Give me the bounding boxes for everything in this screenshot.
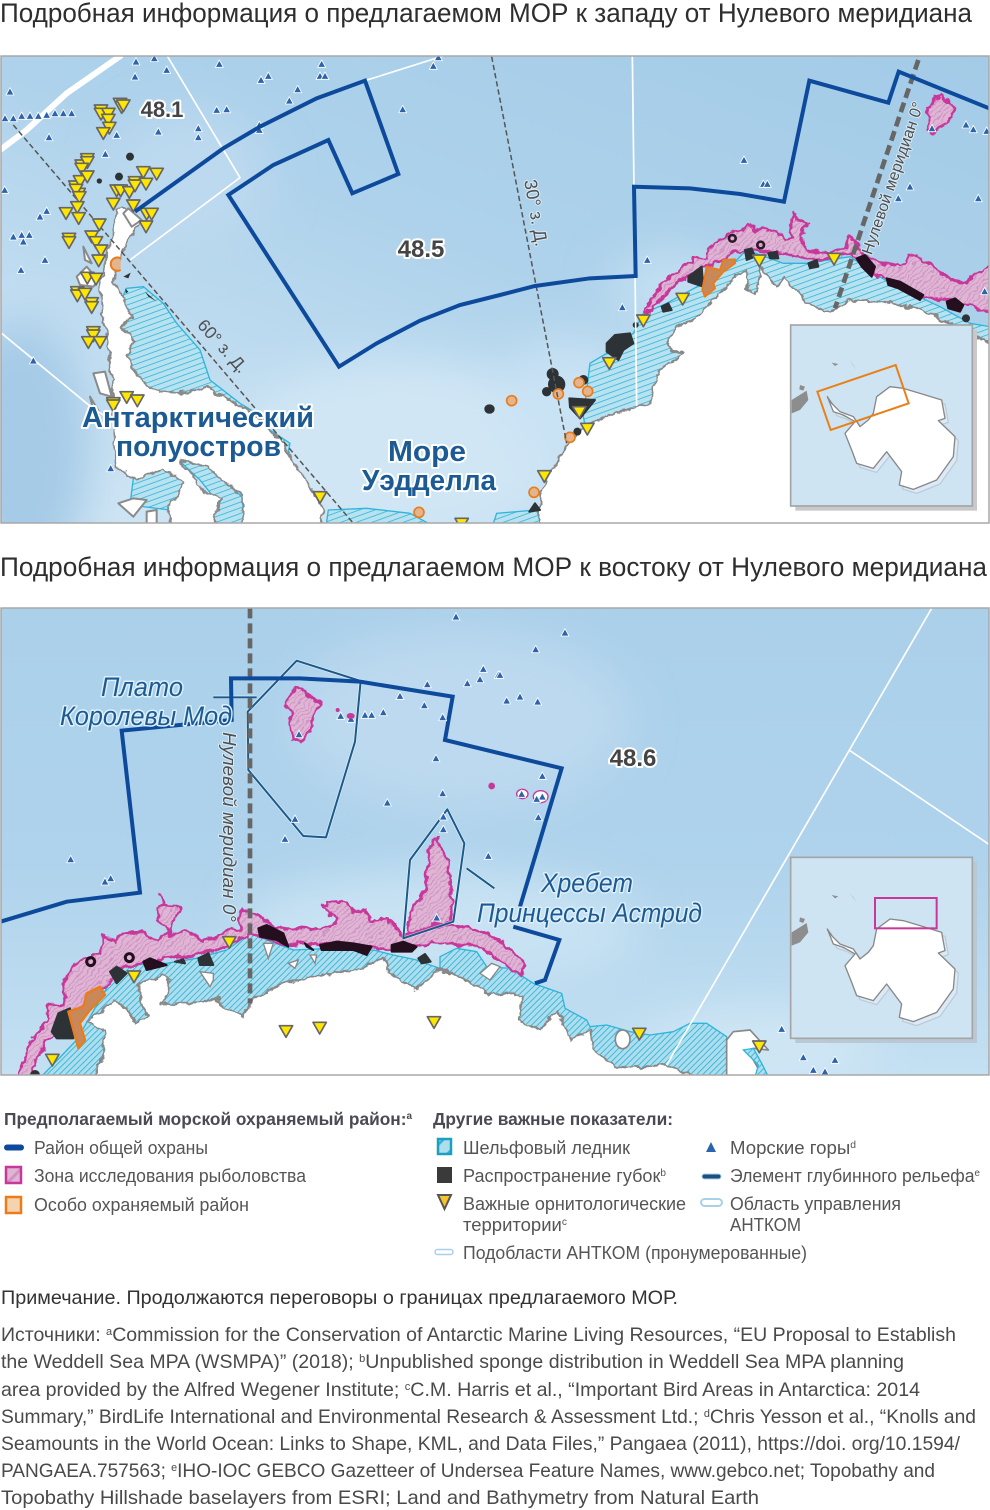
legend: undersea feature: Элемент глубинного рельефа — [730, 1166, 980, 1186]
legend: bird areas — [438, 1194, 686, 1235]
Astrid Ridge fishery research zone — [408, 837, 453, 933]
sources: the Weddell Sea MPA (WSMPA)” (2018); — [1, 1351, 353, 1373]
meridian labels: 30° з. Д. — [520, 178, 552, 248]
legend: CCAMLR area — [701, 1194, 901, 1235]
CCAMLR management area boundary — [0, 55, 122, 153]
seamounts — [1, 53, 442, 472]
Antarctic land — [540, 267, 990, 533]
legend — [4, 1109, 980, 1263]
fishery research zone — [645, 213, 990, 317]
small shelf near east edge — [743, 1048, 772, 1083]
bird areas — [633, 1028, 766, 1053]
label: subarea 48.6: 48.6 — [610, 745, 656, 772]
ocean background — [1, 608, 989, 1075]
sponge distribution — [31, 925, 431, 1079]
ice shelf — [582, 252, 988, 422]
legend: bird areas: c — [562, 1217, 567, 1228]
legend: seamounts: Морские горы — [730, 1138, 846, 1158]
sources: IHO-IOC GEBCO Gazetteer of Undersea Feature Names, www.gebco.net; Topobathy and — [177, 1460, 935, 1482]
small fishery patches — [336, 708, 495, 789]
seamounts — [618, 121, 990, 311]
Maud Rise fishery research zone — [285, 687, 321, 742]
general protection zone boundary — [0, 678, 562, 983]
label: Maud Rise — [60, 672, 232, 731]
label: Antarctic Peninsula: полуостров — [116, 431, 281, 463]
locator inset — [791, 325, 977, 511]
map: west of prime meridian — [2, 56, 988, 522]
meridian label 60 W: 60° з. Д. — [194, 315, 252, 377]
legend: sponges: Распространение губок — [463, 1166, 659, 1186]
sources: area provided by the Alfred Wegener Institute; — [1, 1379, 397, 1401]
sources: Источники: — [1, 1324, 101, 1346]
label: Maud Rise: Плато — [101, 672, 183, 702]
legend: bird areas: Важные орнитологические — [463, 1194, 686, 1214]
meridian labels: Нулевой меридиан 0° — [859, 100, 928, 257]
legend heading: proposed MPA: a — [406, 1111, 412, 1122]
east part — [496, 608, 990, 1083]
ice shelves — [122, 286, 428, 522]
meridian labels — [520, 100, 928, 257]
seamounts — [496, 629, 839, 1075]
sources: Topobathy Hillshade baselayers from ESRI; Land and Bathymetry from Natural Earth — [1, 1487, 759, 1509]
legend: subareas: Подобласти АНТКОМ (пронумерованные) — [463, 1243, 807, 1263]
ocean background — [1, 56, 989, 523]
locator inset — [791, 857, 977, 1043]
map 1 frame — [1, 56, 989, 523]
bird areas — [59, 98, 468, 530]
sources: Summary,” BirdLife International and Environmental Research & Assessment Ltd.; — [1, 1406, 708, 1428]
bird areas — [538, 253, 841, 482]
sources: d — [704, 1408, 710, 1420]
west part: peninsula and Weddell sea — [0, 53, 494, 533]
map 2 frame — [1, 608, 989, 1075]
prime meridian — [835, 60, 918, 308]
special protection area — [68, 987, 105, 1048]
legend: CCAMLR area: АНТКОМ — [730, 1215, 801, 1235]
sources — [1, 1324, 976, 1509]
label: Astrid Ridge: Хребет — [540, 868, 633, 898]
sponge dots — [97, 153, 494, 414]
ice rise and coastal land — [615, 1030, 768, 1083]
label: Weddell Sea — [362, 436, 497, 497]
legend heading: other features: Другие важные показатели: — [433, 1109, 673, 1129]
ice shelf — [35, 933, 728, 1083]
label: Weddell Sea: Уэдделла — [362, 465, 497, 497]
label: Antarctic Peninsula: Антарктический — [82, 402, 314, 434]
label: Weddell Sea: Море — [388, 436, 466, 468]
legend: CCAMLR area: Область управления — [730, 1194, 901, 1214]
sources: Commission for the Conservation of Antarctic Marine Living Resources, “EU Proposal to Establish — [112, 1324, 956, 1346]
map: east of prime meridian — [0, 608, 990, 1090]
CCAMLR subarea line — [632, 55, 637, 406]
east part: Weddell coast — [486, 55, 990, 533]
seamounts — [67, 613, 502, 921]
special protection areas — [507, 259, 735, 497]
title: east map: Подробная информация о предлагаемом МОР к востоку от Нулевого меридиана — [0, 552, 988, 582]
legend: bird areas: территории — [463, 1215, 559, 1235]
sources: e — [171, 1462, 177, 1474]
CCAMLR subarea lines — [667, 608, 990, 1065]
legend: special protection area: Особо охраняемый район — [34, 1195, 249, 1215]
bird areas — [46, 937, 441, 1066]
prime meridian — [243, 608, 257, 1003]
Antarctic land — [88, 958, 713, 1083]
labels: subareas: 48.1 — [141, 97, 183, 122]
general protection zone boundary — [135, 72, 990, 367]
Antarctic Peninsula land — [100, 207, 323, 533]
sources: C.M. Harris et al., “Important Bird Areas in Antarctica: 2014 — [410, 1379, 920, 1401]
meridian label: Нулевой меридиан 0° — [219, 732, 239, 922]
CCAMLR subarea boundaries — [2, 55, 443, 432]
sources: PANGAEA.757563; — [1, 1460, 170, 1482]
map contents — [0, 608, 990, 1083]
sponge distribution — [486, 235, 969, 512]
60 degrees W meridian — [13, 125, 353, 523]
legend heading: proposed MPA: Предполагаемый морской охраняемый район: — [4, 1109, 411, 1129]
legend: ice shelf: Шельфовый ледник — [463, 1138, 630, 1158]
label: Maud Rise: Королевы Мод — [60, 701, 232, 731]
labels: subareas — [141, 97, 444, 263]
legend: undersea feature: e — [975, 1168, 980, 1179]
legend: sponges: b — [660, 1168, 666, 1179]
30 W meridian — [492, 57, 567, 443]
legend: seamounts: d — [850, 1140, 856, 1151]
sources: Seamounts in the World Ocean: Links to Shape, KML, and Data Files,” Pangaea (2011), https://doi. org/10.1594/ — [1, 1433, 961, 1455]
Maud Rise fishery research zone — [927, 93, 955, 133]
seamount patches — [517, 789, 548, 803]
undersea feature outlines — [213, 661, 494, 938]
label: Astrid Ridge: Принцессы Астрид — [477, 898, 702, 928]
islands — [77, 208, 157, 525]
sources: b — [359, 1353, 365, 1365]
ice rises — [200, 943, 500, 987]
sources: Unpublished sponge distribution in Weddell Sea MPA planning — [365, 1351, 904, 1373]
label: Astrid Ridge — [477, 868, 702, 928]
sources: c — [405, 1381, 411, 1393]
special protection patches — [111, 257, 424, 517]
note: Примечание. Продолжаются переговоры о границах предлагаемого МОР. — [1, 1287, 678, 1309]
legend: general protection zone: Район общей охраны — [34, 1138, 208, 1158]
labels: subareas: 48.5 — [398, 236, 444, 263]
label: Antarctic Peninsula — [82, 402, 314, 463]
legend: fishery research zone: Зона исследования рыболовства — [34, 1166, 307, 1186]
sources: Chris Yesson et al., “Knolls and — [710, 1406, 976, 1428]
coastal fishery research zone — [17, 895, 523, 1083]
sources: a — [106, 1326, 113, 1338]
